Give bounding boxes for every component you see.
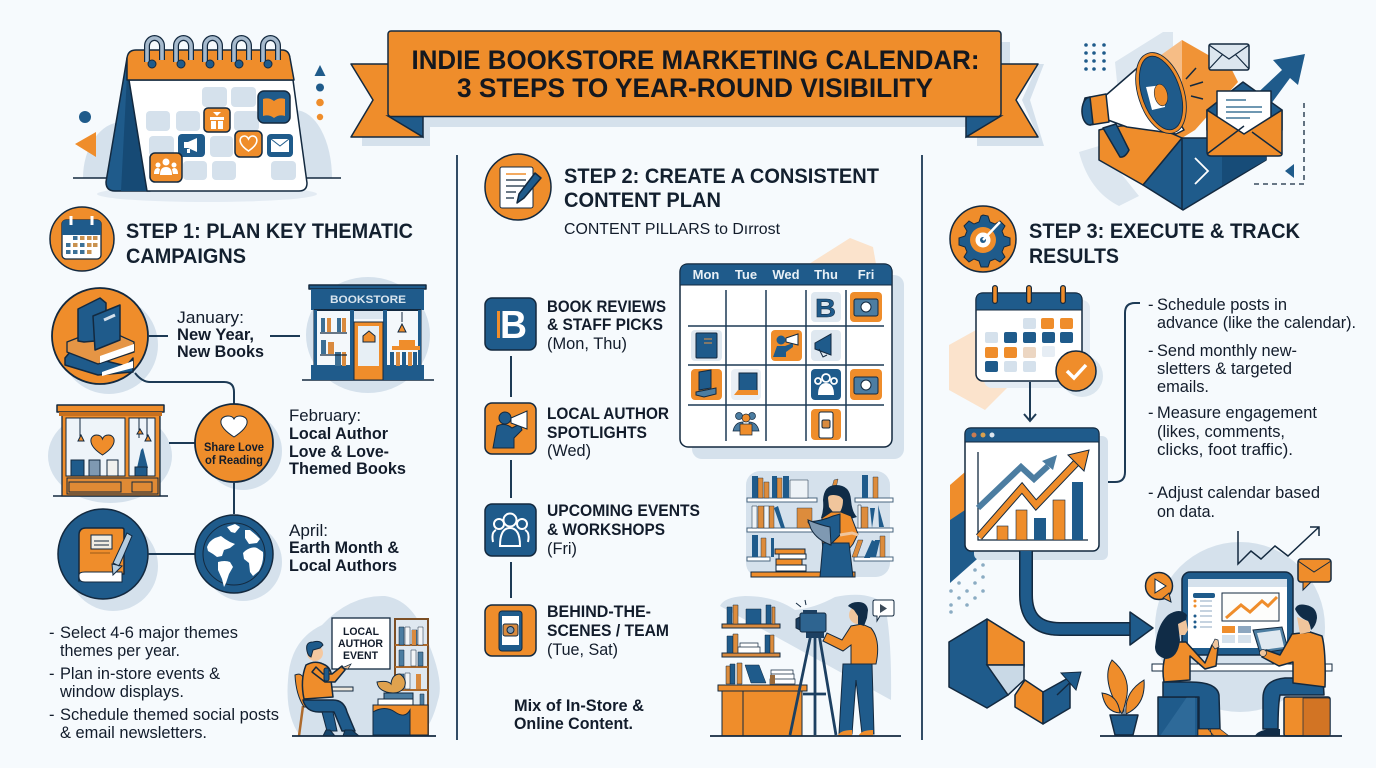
illustration: megaphone, box and envelope — [1079, 32, 1305, 210]
schedule calendar with check — [949, 288, 1103, 421]
pillar: local author spotlights: SPOTLIGHTS — [547, 423, 647, 442]
step 2 heading: CONTENT PLAN — [564, 188, 721, 212]
illustration: local author event — [288, 596, 440, 736]
april text: Local Authors — [289, 556, 397, 575]
pillar: local author spotlights: (Wed) — [547, 441, 591, 460]
pillar: local author spotlights — [485, 403, 669, 460]
step 3 bullet list: (likes, comments, — [1157, 423, 1285, 441]
step 2 heading — [564, 164, 879, 212]
step 1 bullet list: window displays. — [59, 683, 184, 701]
weekly content calendar: Wed — [772, 267, 800, 282]
pillar: upcoming events: & WORKSHOPS — [547, 520, 665, 539]
january text: New Books — [177, 342, 264, 361]
january text: January: — [177, 308, 244, 327]
big arrow to team — [1026, 551, 1153, 645]
pillar: behind the scenes: BEHIND-THE- — [547, 602, 651, 621]
pillar: local author spotlights: LOCAL AUTHOR — [547, 404, 669, 423]
medallion: share love of reading — [195, 404, 282, 490]
step 3 bullet list: clicks, foot traffic). — [1157, 441, 1293, 459]
april: notebook medallion — [58, 509, 158, 611]
step 1 heading — [126, 219, 413, 268]
step 3 bullet list: Measure engagement — [1157, 404, 1317, 422]
illustration: filming in the bookstore — [710, 595, 901, 736]
illustration: bookstore front: BOOKSTORE — [330, 294, 406, 306]
weekly content calendar: B — [815, 293, 836, 323]
panel: step 2 — [485, 154, 904, 736]
step 3 bullet list: - — [1148, 484, 1154, 502]
step 1 bullet list: Select 4-6 major themes — [60, 624, 238, 642]
step 2 subheading: CONTENT PILLARS to Dırrost — [564, 221, 781, 238]
pillar: behind the scenes: (Tue, Sat) — [547, 640, 618, 659]
step 3 heading — [1029, 219, 1300, 268]
step 1 heading: CAMPAIGNS — [126, 244, 246, 268]
april text: Earth Month & — [289, 538, 399, 557]
step 1 bullet list: - — [49, 665, 54, 683]
february text: Themed Books — [289, 459, 406, 478]
weekly content calendar: Tue — [735, 267, 757, 282]
january: books medallion — [52, 288, 158, 394]
step 1 bullet list: & email newsletters. — [60, 724, 207, 742]
mix note: Online Content. — [514, 714, 633, 733]
step 1 bullet list: Plan in-store events & — [60, 665, 220, 683]
february: shop window — [48, 405, 172, 503]
decorative banner and dots — [949, 472, 985, 614]
step 3 bullet list: Schedule posts in — [1157, 296, 1287, 314]
illustration: local author event: LOCAL — [343, 626, 379, 638]
pillar: book reviews: (Mon, Thu) — [547, 334, 627, 353]
pillar: upcoming events — [485, 501, 700, 558]
step 3 bullet list: Adjust calendar based — [1157, 484, 1320, 502]
february text: Local Author — [289, 424, 388, 443]
pillar: book reviews: B — [500, 304, 527, 347]
pillar: book reviews: BOOK REVIEWS — [547, 297, 666, 316]
weekly content calendar: Thu — [814, 267, 838, 282]
trend chart window — [965, 428, 1108, 560]
step 3 icon — [950, 206, 1016, 272]
hexagon pie and cube — [949, 619, 1081, 724]
step 1 bullet list: Schedule themed social posts — [60, 706, 279, 724]
january text: New Year, — [177, 325, 254, 344]
february text — [289, 406, 406, 478]
pillar: upcoming events: (Fri) — [547, 539, 577, 558]
title banner — [351, 31, 1044, 146]
pillar: upcoming events: UPCOMING EVENTS — [547, 501, 700, 520]
step 1 icon — [50, 207, 114, 271]
january text — [177, 308, 264, 361]
step 1 bullet list: - — [49, 706, 54, 724]
february text: February: — [289, 406, 361, 425]
step 2 heading: STEP 2: CREATE A CONSISTENT — [564, 164, 879, 188]
step 3 bullet list: - — [1148, 404, 1154, 422]
medallion: share love of reading: Share Love — [204, 440, 264, 454]
panel: step 3 — [949, 206, 1356, 736]
weekly content calendar: Mon — [693, 267, 719, 282]
weekly content calendar: Fri — [858, 267, 874, 282]
illustration: staff reading among shelves — [746, 471, 893, 577]
pillar: behind the scenes — [485, 602, 669, 659]
illustration: local author event: AUTHOR — [338, 638, 383, 650]
mix note — [514, 696, 644, 733]
medallion: share love of reading: of Reading — [205, 453, 263, 467]
title text — [412, 45, 980, 103]
mix note: Mix of In-Store & — [514, 696, 644, 715]
step 3 bullet list: Send monthly new- — [1157, 342, 1297, 360]
panel: step 1 — [48, 207, 440, 742]
title text: 3 STEPS TO YEAR-ROUND VISIBILITY — [457, 73, 933, 103]
illustration: team reviewing dashboard — [1100, 527, 1342, 736]
medallion: globe — [195, 515, 282, 601]
february text: Love & Love- — [289, 442, 389, 461]
illustration: bookstore front — [302, 277, 434, 393]
step 3 bullet list — [1148, 296, 1356, 521]
step 3 heading: STEP 3: EXECUTE & TRACK — [1029, 219, 1300, 243]
illustration: local author event: EVENT — [343, 650, 378, 662]
april text — [289, 521, 399, 575]
weekly content calendar — [680, 238, 904, 459]
step 3 bullet list: - — [1148, 342, 1154, 360]
step 3 bullet list: emails. — [1157, 378, 1209, 396]
step 3 bullet list: sletters & targeted — [1157, 360, 1292, 378]
step 2 icon — [485, 154, 551, 220]
april text: April: — [289, 521, 328, 540]
pillar: book reviews: & STAFF PICKS — [547, 315, 663, 334]
step 1 bullet list: - — [49, 624, 54, 642]
step 1 heading: STEP 1: PLAN KEY THEMATIC — [126, 219, 413, 243]
step 3 heading: RESULTS — [1029, 244, 1119, 268]
step 1 bullet list — [49, 624, 279, 742]
title text: INDIE BOOKSTORE MARKETING CALENDAR: — [412, 45, 980, 75]
step 3 bullet list: on data. — [1157, 503, 1215, 521]
step 3 bullet list: - — [1148, 296, 1154, 314]
step 1 bullet list: themes per year. — [60, 642, 180, 660]
step 3 bullet list: advance (like the calendar). — [1157, 314, 1356, 332]
pillar: book reviews — [485, 297, 666, 353]
pillar: behind the scenes: SCENES / TEAM — [547, 621, 669, 640]
illustration: wall calendar — [73, 38, 341, 202]
